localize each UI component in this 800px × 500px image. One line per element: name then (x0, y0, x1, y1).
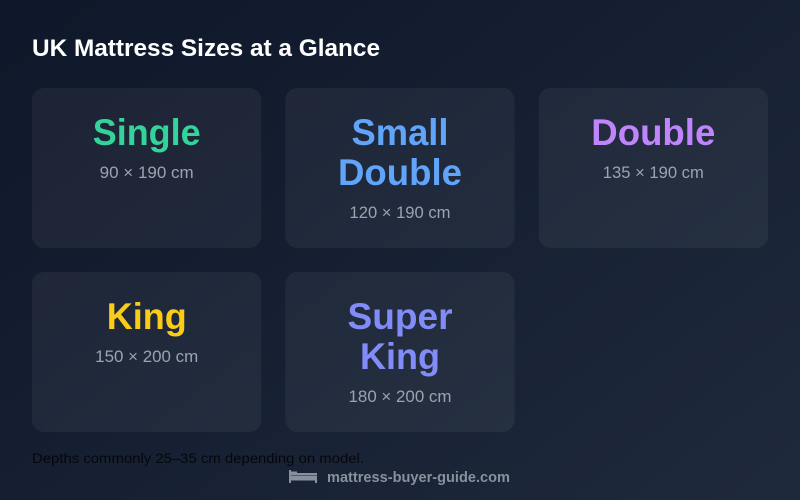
panel: Small Double (285, 88, 515, 248)
title: UK Mattress Sizes at a Glance (32, 35, 380, 62)
site name: mattress-buyer-guide.com (327, 470, 510, 486)
footnote: Depths commonly 25–35 cm depending on model. (32, 450, 364, 466)
panel: Super King: King (360, 336, 440, 377)
panel: Small Double: Small (352, 112, 448, 153)
panel: King: King (107, 296, 187, 337)
panel: King (32, 272, 261, 432)
panel: Super King (285, 272, 515, 432)
panel: Super King: Super (348, 296, 452, 337)
panel: King: 150 × 200 cm (95, 348, 198, 366)
panel: Double: Double (591, 112, 715, 153)
branding footer (289, 470, 510, 486)
panel: Double: 135 × 190 cm (603, 164, 704, 182)
panel: Single: 90 × 190 cm (100, 164, 194, 182)
panel: Small Double: 120 × 190 cm (350, 204, 450, 222)
icon: bed (289, 470, 317, 483)
panel: Double (539, 88, 768, 248)
panel: Single: Single (93, 112, 201, 153)
panel: Super King: 180 × 200 cm (348, 388, 452, 406)
panel: Small Double: Double (338, 152, 462, 193)
panel: Single (32, 88, 261, 248)
